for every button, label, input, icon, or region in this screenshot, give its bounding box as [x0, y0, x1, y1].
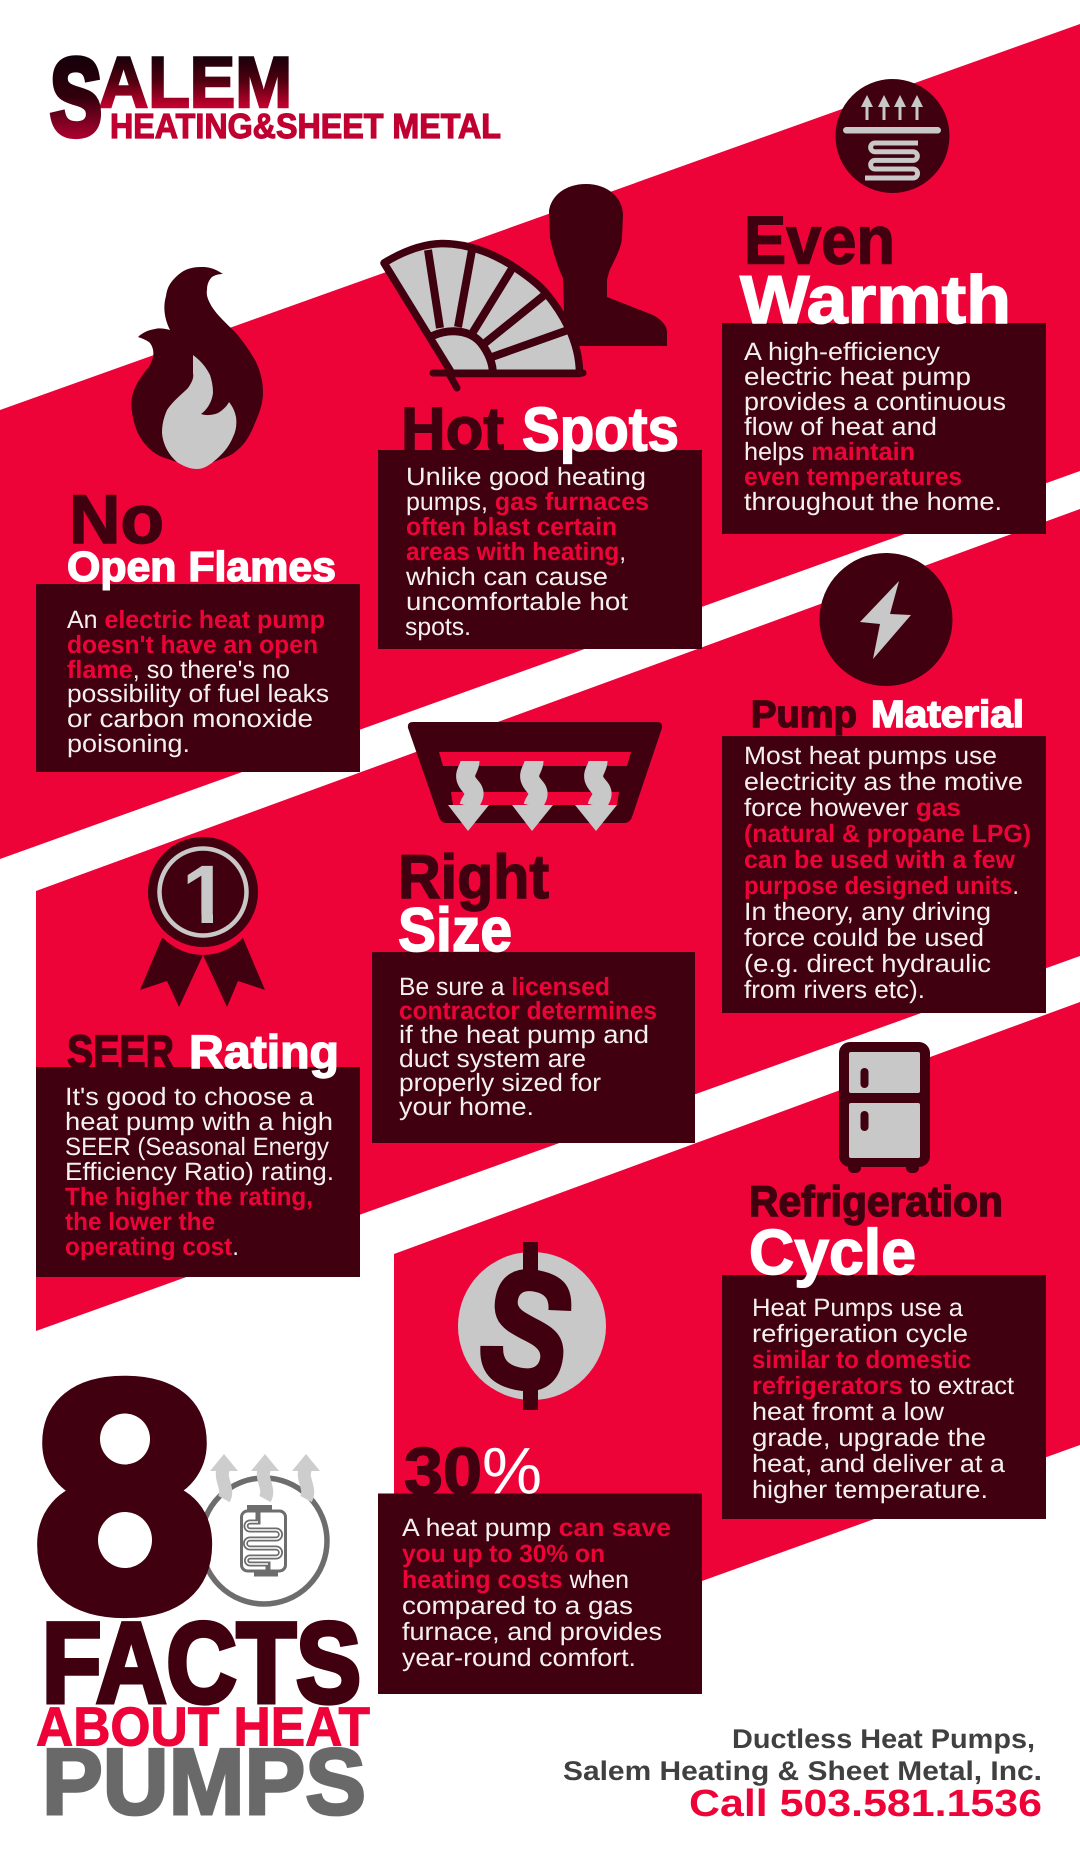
heading: 8: 8: [37, 1321, 212, 1672]
text: even warmth body: throughout the home.: [744, 488, 1002, 516]
text: pump material body: from rivers etc).: [744, 976, 925, 1004]
text: SEER rating body: operating cost.: [65, 1233, 239, 1261]
text: 30 percent savings body: A heat pump can save: [402, 1514, 671, 1542]
heading: No Open Flames: No: [69, 481, 164, 558]
icon: person silhouette: [549, 184, 667, 346]
text: SEER rating body: SEER (Seasonal Energy: [65, 1133, 329, 1161]
text: even warmth body: provides a continuous: [744, 388, 1006, 416]
text: hot spots body: often blast certain: [406, 513, 617, 541]
text: no open flames body: doesn't have an open: [67, 631, 318, 659]
text: SEER rating body: The higher the rating,: [65, 1183, 313, 1211]
heading: Refrigeration Cycle: Refrigeration: [749, 1178, 1003, 1226]
text: no open flames body: An electric heat pump: [67, 606, 325, 634]
text: no open flames body: flame, so there's no: [67, 656, 290, 684]
box: SEER rating: [36, 1067, 360, 1277]
text: hot spots body: pumps, gas furnaces: [406, 488, 649, 516]
text: pump material body: Most heat pumps use: [744, 742, 997, 770]
heading: Refrigeration Cycle: Cycle: [749, 1216, 916, 1288]
text: right size body: if the heat pump and: [399, 1021, 649, 1049]
text: hot spots body: spots.: [405, 613, 471, 641]
text: pump material body: [744, 742, 1031, 1004]
heading: Pump Material: [751, 694, 1024, 736]
text: right size body: [399, 973, 657, 1121]
text: right size body: properly sized for: [399, 1069, 601, 1097]
panel: even warmth: [722, 79, 1046, 534]
text: no open flames body: [67, 606, 329, 758]
text: refrigeration cycle body: refrigeration cycle: [752, 1320, 968, 1348]
icon: award ribbon number one: [140, 837, 265, 1007]
heading: 30%: %: [482, 1434, 542, 1508]
heading: Even Warmth: [740, 202, 1011, 338]
text: no open flames body: poisoning.: [67, 730, 190, 758]
heading: Hot Spots: Hot: [401, 396, 504, 464]
text: hot spots body: uncomfortable hot: [406, 588, 628, 616]
text: refrigeration cycle body: heat, and deliver at a: [752, 1450, 1005, 1478]
text: even warmth body: electric heat pump: [744, 363, 971, 391]
box: refrigeration cycle: [722, 1275, 1046, 1519]
text: 30 percent savings body: compared to a gas: [402, 1592, 633, 1620]
heading: Pump Material: Pump: [751, 694, 857, 736]
heading: PUMPS: PUMPS: [42, 1729, 366, 1834]
text: even warmth body: flow of heat and: [744, 413, 937, 441]
panel: SEER rating: [36, 837, 360, 1277]
text: refrigeration cycle body: Heat Pumps use a: [752, 1294, 963, 1322]
panel: refrigeration cycle: [722, 1042, 1046, 1519]
icon: radiant heating coil: [836, 79, 950, 193]
panel: no open flames: [36, 267, 360, 772]
heading: Even Warmth: Warmth: [740, 262, 1011, 338]
icon: hand fan: [384, 244, 583, 388]
text: refrigeration cycle body: heat fromt a low: [752, 1398, 945, 1426]
box: 30 percent savings: [378, 1494, 702, 1694]
heading: SEER Rating: [67, 1025, 339, 1078]
heading: SEER Rating: Rating: [189, 1025, 339, 1078]
text: pump material body: In theory, any driving: [744, 898, 991, 926]
text: SEER rating body: It's good to choose a: [65, 1083, 314, 1111]
text: 30 percent savings body: year-round comfort.: [402, 1644, 636, 1672]
text: even warmth body: [744, 338, 1006, 516]
heading: Even Warmth: Even: [744, 202, 895, 278]
text: 30 percent savings body: [402, 1514, 671, 1672]
text: SEER rating body: heat pump with a high: [65, 1108, 333, 1136]
text: pump material body: can be used with a few: [744, 846, 1016, 874]
icon: flame: [131, 267, 263, 469]
text: SEER rating body: [65, 1083, 334, 1261]
heading: ABOUT HEAT: ABOUT HEAT: [36, 1696, 370, 1758]
heading: Pump Material: Material: [871, 694, 1024, 736]
icon: lightning bolt: [820, 553, 952, 686]
text: pump material body: (natural & propane LPG): [744, 820, 1031, 848]
heading: Refrigeration Cycle: [749, 1178, 1003, 1288]
text: right size body: duct system are: [399, 1045, 586, 1073]
heading: FACTS: FACTS: [42, 1600, 361, 1727]
text: refrigeration cycle body: refrigerators to extract: [752, 1372, 1014, 1400]
text: pump material body: (e.g. direct hydraulic: [744, 950, 991, 978]
text: 30 percent savings body: you up to 30% on: [402, 1540, 605, 1568]
text: 30 percent savings body: heating costs when: [402, 1566, 629, 1594]
box: even warmth: [722, 323, 1046, 534]
text: right size body: contractor determines: [399, 997, 657, 1025]
footer: contact: [563, 1724, 1042, 1825]
text: hot spots body: Unlike good heating: [406, 463, 646, 491]
title block: 8 facts about heat pumps: [36, 1321, 370, 1834]
heading: SEER Rating: SEER: [67, 1025, 174, 1078]
icon: duct with airflow arrows: [408, 722, 662, 831]
text: pump material body: electricity as the motive: [744, 768, 1023, 796]
box: no open flames: [36, 584, 360, 772]
logo: Salem Heating & Sheet Metal: HEATING&SHEET METAL: [110, 107, 501, 146]
panel: pump material: [722, 553, 1046, 1013]
text: 30 percent savings body: furnace, and provides: [402, 1618, 662, 1646]
text: even warmth body: helps maintain: [744, 438, 915, 466]
heading: Right Size: [398, 843, 549, 965]
panel: right size: [372, 722, 695, 1143]
heading: 30%: [404, 1434, 542, 1508]
heading: No Open Flames: [67, 481, 336, 590]
footer: contact: Salem Heating & Sheet Metal, Inc.: [563, 1756, 1042, 1786]
text: refrigeration cycle body: grade, upgrade the: [752, 1424, 986, 1452]
logo: Salem Heating & Sheet Metal: S: [50, 36, 102, 159]
text: refrigeration cycle body: similar to domestic: [752, 1346, 971, 1374]
heading: Right Size: Size: [398, 896, 512, 965]
text: hot spots body: [405, 463, 649, 641]
text: right size body: your home.: [399, 1093, 534, 1121]
text: even warmth body: A high-efficiency: [744, 338, 941, 366]
box: hot spots: [378, 450, 702, 649]
text: SEER rating body: the lower the: [65, 1208, 215, 1236]
icon: dollar coin: S: [465, 1231, 590, 1429]
heading: 30%: 30: [404, 1434, 482, 1508]
text: no open flames body: or carbon monoxide: [67, 705, 313, 733]
panel: hot spots: [378, 184, 702, 649]
icon: refrigerator: [839, 1042, 930, 1173]
box: pump material: [722, 736, 1046, 1013]
text: pump material body: purpose designed units.: [744, 872, 1019, 900]
icon: award ribbon number one: 1: [182, 848, 228, 941]
text: no open flames body: possibility of fuel leaks: [67, 680, 329, 708]
footer: contact: Ductless Heat Pumps,: [732, 1724, 1035, 1754]
text: even warmth body: even temperatures: [744, 463, 962, 491]
text: SEER rating body: Efficiency Ratio) rating.: [65, 1158, 334, 1186]
logo: Salem Heating & Sheet Metal: ALEM: [99, 43, 292, 123]
text: pump material body: force could be used: [744, 924, 984, 952]
text: refrigeration cycle body: higher temperature.: [752, 1476, 988, 1504]
heading: Hot Spots: [401, 396, 679, 464]
text: pump material body: force however gas: [744, 794, 961, 822]
heading: Right Size: Right: [398, 843, 549, 912]
text: hot spots body: which can cause: [405, 563, 608, 591]
logo: Salem Heating & Sheet Metal: [50, 36, 501, 159]
panel: 30 percent savings: [378, 1231, 702, 1694]
icon: heat pump in circle: [201, 1454, 327, 1604]
text: refrigeration cycle body: [752, 1294, 1014, 1504]
heading: No Open Flames: Open Flames: [67, 543, 336, 590]
footer: contact: Call 503.581.1536: [689, 1783, 1042, 1825]
text: right size body: Be sure a licensed: [399, 973, 610, 1001]
text: hot spots body: areas with heating,: [406, 538, 626, 566]
box: right size: [372, 952, 695, 1143]
heading: Hot Spots: Spots: [522, 396, 679, 464]
